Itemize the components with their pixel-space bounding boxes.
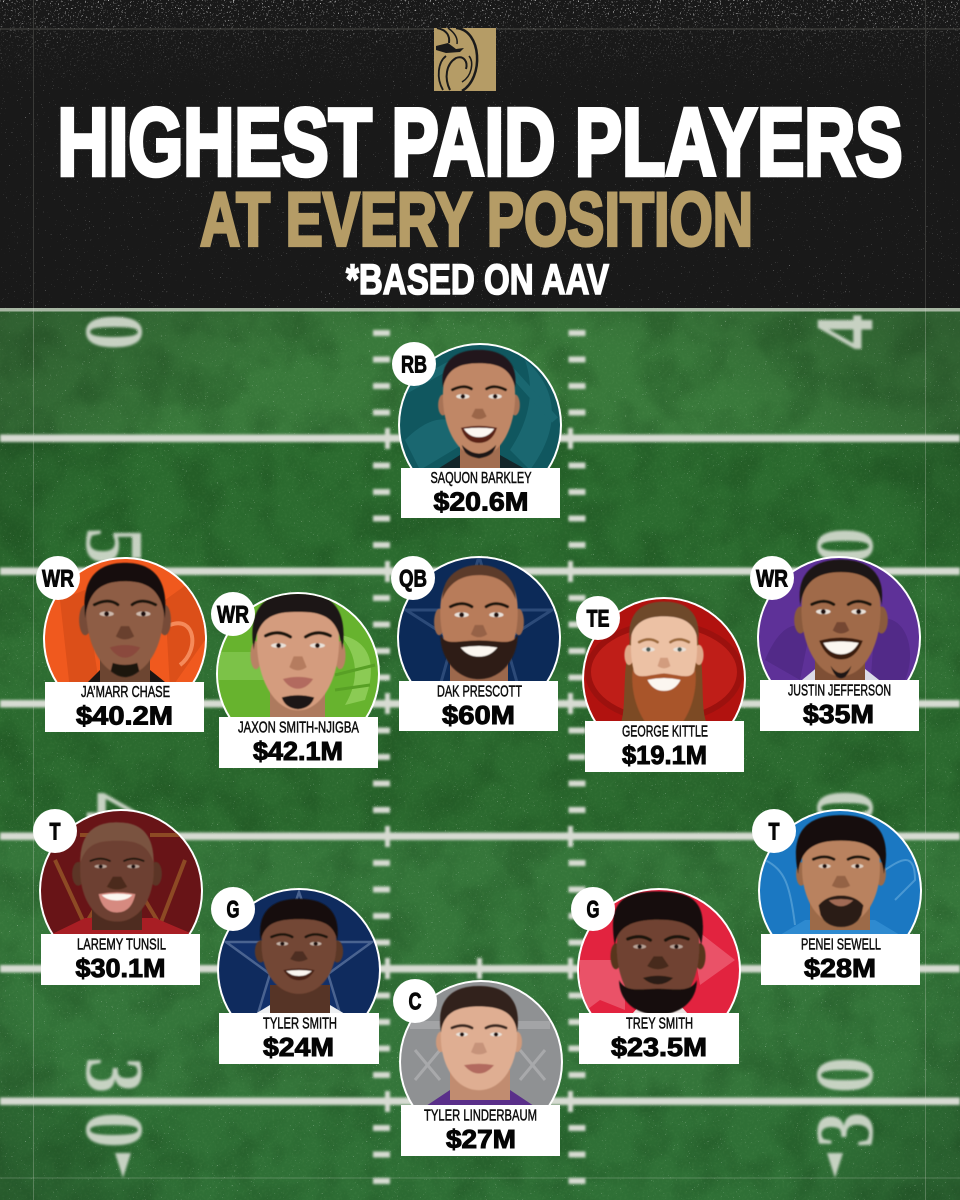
badge: WR: WR: [42, 566, 74, 592]
label: Jaxon Smith-Njigba salary: JAXON SMITH-NJIGBA: [238, 720, 359, 736]
badge: G: G: [586, 896, 600, 924]
label: Tyler Smith salary: TYLER SMITH: [263, 1016, 337, 1032]
badge: TE: TE: [586, 606, 610, 632]
badge: T: T: [50, 818, 61, 846]
badge: QB: QB: [399, 566, 427, 592]
badge: WR: [750, 556, 794, 600]
photo: George Kittle: [584, 599, 744, 721]
photo: Jaxon Smith-Njigba: [218, 594, 378, 717]
label: Ja'Marr Chase salary: JA’MARR CHASE: [81, 684, 170, 701]
label: Tyler Linderbaum salary: TYLER LINDERBAUM: [424, 1108, 537, 1124]
photo: Trey Smith: [579, 890, 739, 1013]
badge: C: [393, 979, 437, 1023]
yard numbers: 4: [798, 314, 890, 350]
player card: WR Justin Jefferson: [750, 556, 921, 731]
photo: Ja'Marr Chase: [45, 559, 205, 682]
photo: Tyler Smith: [219, 890, 379, 1013]
header band: [0, 0, 960, 308]
label: Justin Jefferson salary: JUSTIN JEFFERSON: [788, 682, 891, 700]
label: Penei Sewell salary: PENEI SEWELL: [801, 936, 881, 954]
label: Laremy Tunsil salary: $30.1M: [76, 953, 166, 983]
label: Saquon Barkley salary: SAQUON BARKLEY: [430, 470, 532, 487]
badge: G: [211, 887, 255, 931]
player card: WR Jaxon Smith-Njigba: [211, 592, 380, 768]
photo: Saquon Barkley: [400, 345, 560, 468]
yard numbers: 0: [798, 528, 890, 564]
badge: T: [752, 809, 796, 853]
label: Ja'Marr Chase salary: [45, 682, 204, 732]
player card: TE George Kittle: [576, 596, 746, 772]
player card: G Trey Smith: [571, 887, 741, 1064]
note: based on AAV: *BASED ON AAV: [346, 256, 609, 304]
yard numbers: [69, 314, 890, 1178]
label: Jaxon Smith-Njigba salary: [219, 717, 378, 768]
label: Dak Prescott salary: [399, 681, 558, 731]
player card: T Laremy Tunsil: [33, 809, 203, 985]
badge: T: [33, 809, 77, 853]
label: Trey Smith salary: [579, 1013, 739, 1064]
label: Tyler Smith salary: $24M: [263, 1032, 334, 1062]
title: [58, 89, 902, 262]
label: Tyler Linderbaum salary: $27M: [446, 1124, 516, 1154]
player card: RB Saquon Barkley: [392, 342, 562, 518]
player card: C Tyler Linderbaum: [393, 979, 563, 1156]
label: Justin Jefferson salary: [760, 680, 919, 731]
label: Trey Smith salary: $23.5M: [611, 1032, 707, 1062]
yard numbers: 0: [798, 1057, 890, 1093]
badge: WR: WR: [756, 566, 788, 592]
photo: Dak Prescott: [399, 558, 559, 681]
player card: WR Ja'Marr Chase: [36, 556, 207, 732]
label: Saquon Barkley salary: $20.6M: [434, 486, 528, 516]
icon: lion logo: [434, 28, 496, 91]
badge: RB: [392, 342, 436, 386]
label: Trey Smith salary: TREY SMITH: [626, 1016, 693, 1032]
yard numbers: 5: [69, 528, 161, 564]
photo: Justin Jefferson: [759, 558, 919, 680]
label: Tyler Smith salary: [219, 1013, 379, 1064]
label: Ja'Marr Chase salary: $40.2M: [76, 700, 173, 730]
badge: G: [571, 887, 615, 931]
label: Tyler Linderbaum salary: [401, 1105, 560, 1156]
label: Laremy Tunsil salary: [41, 934, 200, 985]
photo: Penei Sewell: [760, 811, 920, 934]
label: Laremy Tunsil salary: LAREMY TUNSIL: [77, 936, 166, 954]
subtitle: AT EVERY POSITION: [200, 178, 753, 262]
label: George Kittle salary: $19.1M: [622, 740, 707, 770]
badge: WR: [36, 556, 80, 600]
badge: WR: WR: [217, 602, 249, 628]
label: Justin Jefferson salary: $35M: [803, 699, 874, 729]
yard numbers: 4: [69, 792, 161, 828]
badge: WR: [211, 592, 255, 636]
yard numbers: 3: [69, 1057, 161, 1093]
photo: Tyler Linderbaum: [401, 982, 561, 1105]
player card: QB Dak Prescott: [391, 556, 561, 731]
yard numbers: 0: [798, 790, 890, 826]
label: George Kittle salary: [585, 721, 744, 772]
player card: G Tyler Smith: [211, 887, 381, 1064]
badge: T: T: [768, 818, 780, 846]
badge: C: C: [408, 988, 422, 1016]
yard numbers: 0: [69, 1112, 161, 1148]
yard numbers: 0: [69, 314, 161, 350]
badge: TE: [576, 596, 620, 640]
player card: T Penei Sewell: [752, 809, 922, 985]
football field background: [0, 308, 960, 1200]
yard numbers: 3: [798, 1112, 890, 1148]
label: Saquon Barkley salary: [401, 468, 560, 518]
label: Jaxon Smith-Njigba salary: $42.1M: [253, 736, 343, 766]
badge: QB: [391, 556, 435, 600]
label: Penei Sewell salary: [761, 934, 920, 985]
label: Penei Sewell salary: $28M: [804, 953, 876, 983]
photo: Laremy Tunsil: [41, 811, 201, 934]
badge: RB: RB: [401, 352, 427, 378]
label: Dak Prescott salary: $60M: [442, 700, 515, 730]
badge: G: G: [226, 896, 240, 924]
label: George Kittle salary: GEORGE KITTLE: [622, 724, 708, 740]
label: Dak Prescott salary: DAK PRESCOTT: [437, 684, 522, 700]
